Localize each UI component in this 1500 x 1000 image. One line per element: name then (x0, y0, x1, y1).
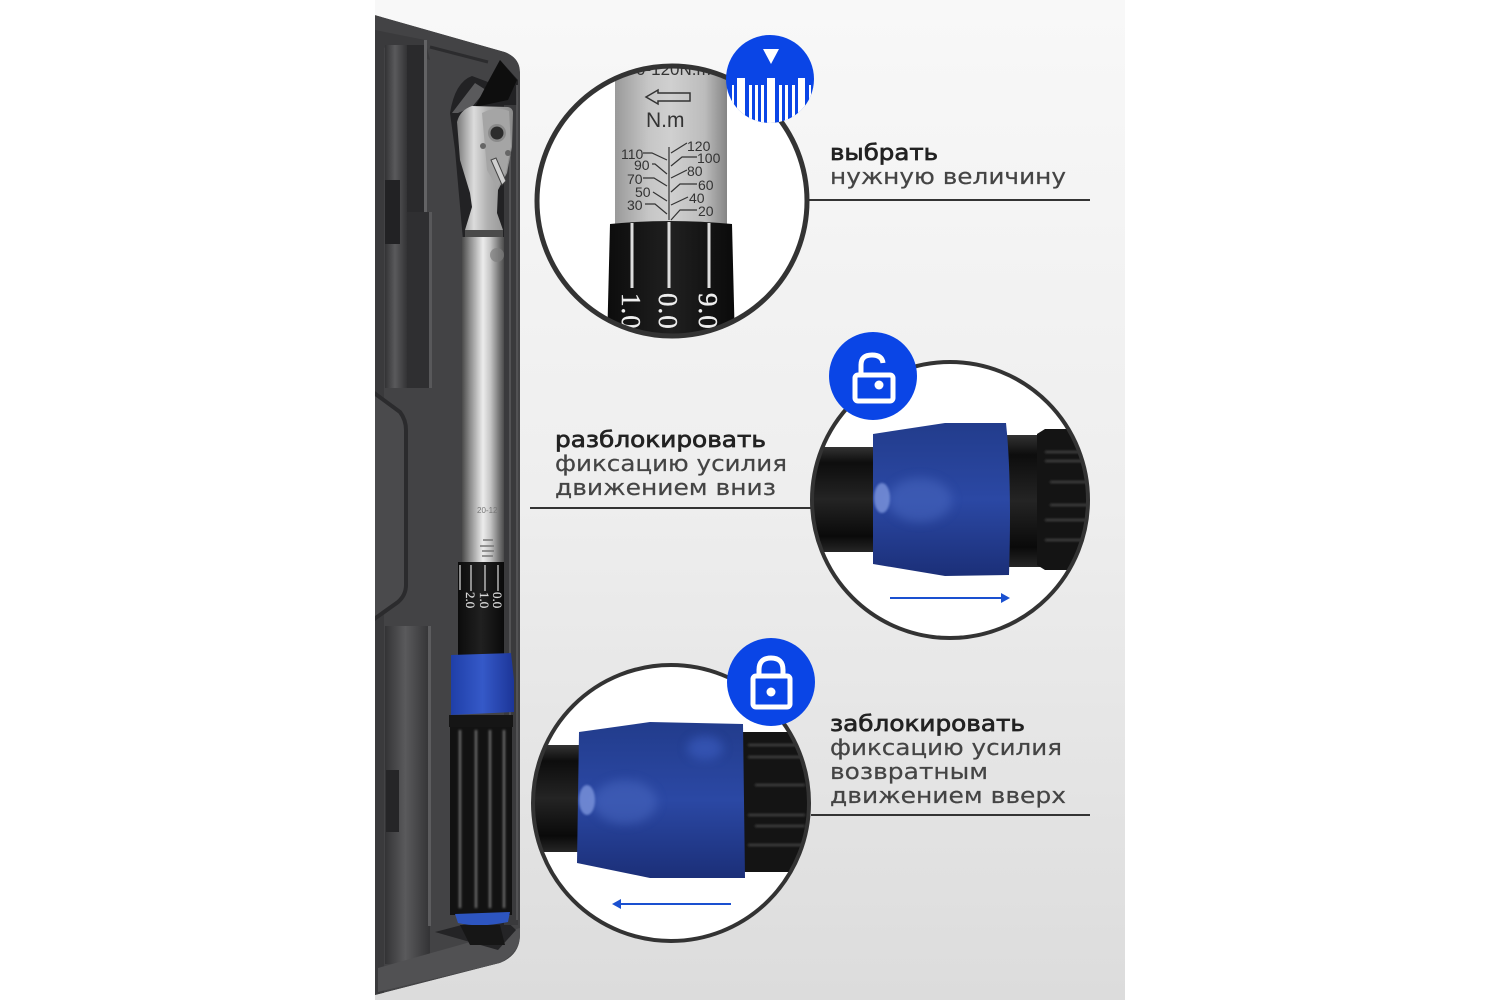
badge: closed lock (727, 638, 815, 726)
detail circle: scale: N.m (646, 109, 684, 132)
caption: unlock (555, 428, 787, 501)
black shaft (535, 745, 579, 852)
wrench tube (462, 237, 504, 562)
torque wrench (449, 106, 514, 945)
detail circle: scale: 50 (635, 184, 651, 200)
detail circle: scale: 30 (627, 197, 643, 213)
caption: lock: возвратным (830, 760, 988, 785)
detail circle: scale: 80 (687, 163, 703, 179)
connector lines (530, 200, 1090, 815)
badge: open lock (829, 332, 917, 420)
detail circle: scale: 40 (689, 190, 705, 206)
torque wrench: 20-12 (477, 506, 498, 515)
detail circle: scale: 20 (698, 203, 714, 219)
detail circle: scale: 0-120N.m (636, 60, 711, 79)
direction arrow (618, 903, 731, 905)
blue end ring (455, 912, 510, 925)
middle recess (370, 390, 406, 622)
ribbed grip (450, 715, 512, 915)
detail circle: scale: 9.0 (693, 293, 723, 330)
ribbed knob (743, 732, 807, 872)
black drum (607, 221, 735, 345)
detail circle: scale: 60 (698, 177, 714, 193)
detail circle: scale: 0.0 (653, 293, 683, 330)
black shaft (814, 447, 873, 552)
detail circle: scale: 70 (627, 171, 643, 187)
caption: select value: нужную величину (830, 165, 1066, 190)
caption: select value: выбрать (830, 141, 938, 166)
ribbed knob (1037, 429, 1086, 570)
detail circle: unlock (805, 362, 1095, 638)
wrench case (370, 15, 520, 1000)
caption: lock: фиксацию усилия (830, 736, 1062, 761)
caption: unlock: фиксацию усилия (555, 452, 787, 477)
torque wrench: 0.0 (490, 592, 505, 608)
background panel (375, 0, 1125, 1000)
caption: unlock: разблокировать (555, 428, 766, 453)
caption: lock: движением вверх (830, 784, 1066, 809)
direction arrow (890, 597, 1003, 599)
wrench head (457, 106, 513, 230)
direction arrow (646, 90, 690, 104)
caption: lock (830, 712, 1066, 809)
blue collar (451, 653, 514, 715)
detail circle: scale: 120 (687, 138, 711, 154)
small digits: 2.0 (463, 592, 478, 608)
silver barrel (615, 60, 727, 228)
blue collar (873, 423, 1010, 576)
detail circle: scale: 1.0 (616, 293, 646, 330)
caption: lock: заблокировать (830, 712, 1025, 737)
caption: select value (830, 141, 1066, 190)
scale numbers: 110 (621, 146, 644, 162)
torque wrench: 1.0 (477, 592, 492, 608)
detail circle: scale (537, 60, 807, 345)
scale drum (458, 562, 504, 657)
badge: scale icon (726, 35, 814, 125)
detail circle: scale: 90 (634, 157, 650, 173)
detail circle: scale: 100 (697, 150, 721, 166)
blue collar (577, 722, 745, 878)
caption: unlock: движением вниз (555, 476, 776, 501)
detail circle: lock (525, 665, 815, 941)
wrench recess (450, 62, 518, 237)
